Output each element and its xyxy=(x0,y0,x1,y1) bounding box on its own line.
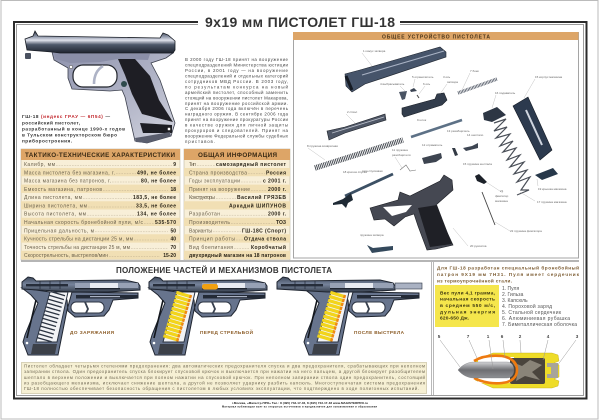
magazine rounds xyxy=(324,293,338,340)
callout numbers: 5 xyxy=(438,334,441,339)
callout numbers: 4 xyxy=(547,334,550,339)
part labels: тяга спусковая xyxy=(362,169,383,173)
table rows: Масса пистолета без магазина, г. xyxy=(24,170,115,176)
part 6 pin xyxy=(417,95,419,98)
safety description text box: ГШ-18 полностью обеспечивает безопасность обращения с пистолетом в любых условиях эксплуатации, что подтверждено в ходе полигонных испытаний. xyxy=(24,386,419,391)
part labels: 2 ствол xyxy=(347,110,358,114)
intro paragraph: спецподразделений Министерства юстиции xyxy=(185,62,289,68)
info rows: Годы эксплуатации xyxy=(189,178,240,184)
intro paragraph: стоящий на вооружении пистолет Макарова, xyxy=(185,95,288,100)
info rows: 2000 г. xyxy=(268,212,287,218)
safety description text box: Пистолет обладает четырьмя степенями предохранения: два автоматических предохранителя спуска и два предохранителя, срабатывающих при неполном xyxy=(24,364,425,368)
part labels: 5 ограничитель xyxy=(412,75,434,79)
panel header bar xyxy=(293,32,578,40)
part 3 slide stop block xyxy=(402,93,447,117)
part labels: пружина затвора xyxy=(360,233,384,237)
title: 9х19 мм ПИСТОЛЕТ ГШ-18 xyxy=(205,14,395,30)
part 23 slide catch xyxy=(367,245,393,253)
part labels: 20 рукоятка xyxy=(470,244,487,248)
info header xyxy=(184,149,290,160)
info rows: Принцип работы xyxy=(189,236,235,242)
info rows: Разработан xyxy=(189,212,220,218)
part 8 recoil spring xyxy=(315,140,403,168)
cartridge parts list: 6. Алюминиевая рубашка xyxy=(502,316,570,322)
part 14 sear xyxy=(463,143,478,151)
part 18 magazine cover xyxy=(535,168,558,180)
part labels: 19 крышка магазина xyxy=(538,187,567,191)
table rows: 134, не более xyxy=(137,211,176,218)
table rows: Высота пистолета, мм xyxy=(24,212,87,218)
part 5 limiter xyxy=(410,88,417,92)
pistol caption: разработанный в конце 1990-х годов xyxy=(22,126,125,132)
table: tactical and technical characteristics xyxy=(21,149,180,260)
trigger xyxy=(94,66,103,84)
section heading: parts positions: ПОЛОЖЕНИЕ ЧАСТЕЙ И МЕХАНИЗМОВ ПИСТОЛЕТА xyxy=(116,266,332,275)
part 17 magazine spring xyxy=(494,119,530,195)
part 11 disconnector spring xyxy=(400,165,416,171)
yellow callout: начальная скорость xyxy=(440,298,495,303)
info rows: двухрядный магазин на 18 патронов xyxy=(189,252,286,259)
case xyxy=(475,353,559,388)
part labels: 3 ось xyxy=(443,75,451,79)
lanyard loop xyxy=(167,127,171,131)
takedown pin xyxy=(121,81,127,87)
intro paragraph: в качестве оружия для личной защиты xyxy=(185,123,288,128)
intro paragraph: прокуроров и следователей. Принят на xyxy=(185,128,289,133)
part labels: 1 кожух затвора xyxy=(363,49,386,53)
gun cutaway: before loading xyxy=(22,277,140,355)
jacket xyxy=(474,356,517,383)
cartridge description: Для ГШ-18 разработан специальный бронебойный xyxy=(437,264,579,270)
safety description text box: шептало в верхнем положении и выключается при полном нажатии на спусковой крючок. При неполном запирании ствола один предохранитель, состоящий xyxy=(24,375,426,380)
table rows: 490, не более xyxy=(137,169,176,176)
part labels: 21 xyxy=(500,189,504,193)
intro paragraph: по результатам конкурса на новый xyxy=(185,84,289,89)
round tips xyxy=(177,295,191,342)
info rows: 2000 г. xyxy=(268,187,287,193)
part labels: 11 пружина xyxy=(392,148,408,152)
info background xyxy=(184,149,290,260)
cartridge parts list: 4. Пороховой заряд xyxy=(502,303,552,310)
info rows: Россия xyxy=(266,170,286,176)
part labels: фиксатор xyxy=(495,194,509,198)
table rows: 50 xyxy=(170,228,176,234)
info rows: с 2001 г. xyxy=(263,178,287,184)
pistol caption: в Тульском конструкторском бюро xyxy=(22,131,117,137)
white cavity xyxy=(478,357,514,383)
main pistol illustration xyxy=(25,31,175,143)
intro paragraph: С декабря 2006 года включён в перечень xyxy=(185,106,289,111)
cartridge description xyxy=(437,264,580,284)
table rows: 40 xyxy=(170,236,176,242)
table header xyxy=(21,149,180,160)
part labels: 22 пружина фиксатора xyxy=(510,229,542,233)
title plate xyxy=(198,18,400,28)
part 12 ejector xyxy=(422,153,442,164)
part labels: 8 пружина возвратная xyxy=(307,144,338,148)
grip panel xyxy=(118,59,173,122)
pistol caption xyxy=(22,114,125,144)
table rows: 70 xyxy=(170,245,176,251)
pistol caption: ГШ-18 (индекс ГРАУ — 6П54) — xyxy=(22,114,110,119)
part labels: 4 выбрасыватель xyxy=(380,82,405,86)
safety description text box: из разобщающего механизма, исключает снижение шептала, а другой не позволяет ударнику разбить капсюль. Многоступенчатая система предохранения xyxy=(24,380,426,386)
chambered round xyxy=(202,284,218,290)
intro paragraph: принят на вооружение российской армии. xyxy=(185,101,288,106)
part labels: затвора xyxy=(447,80,458,84)
frame screw xyxy=(69,65,73,69)
part 22 catch spring xyxy=(482,192,495,225)
table rows: 80, не более xyxy=(141,178,176,184)
callout numbers: 3 xyxy=(576,334,579,339)
part labels: 6 ось xyxy=(423,82,431,86)
info rows: самозарядный пистолет xyxy=(216,161,287,168)
table rows: 15-20 xyxy=(163,253,176,259)
part 10 and 19 trigger bar xyxy=(333,174,393,208)
part labels: 7 боек xyxy=(470,69,480,73)
label: ПЕРЕД СТРЕЛЬБОЙ xyxy=(200,328,254,335)
info rows: ТОЗ xyxy=(276,220,286,226)
intro paragraph: принят на вооружение прокуратуры России xyxy=(185,117,289,122)
magazine spring xyxy=(44,293,58,341)
powder charge xyxy=(510,358,545,384)
gun cutaway: after firing xyxy=(277,277,422,355)
cartridge parts list: 1. Пуля xyxy=(502,286,519,292)
footer imprint: г.Москва, «Магистр-ПРО» Тел.: 8 (495) 743-17-46, 8 (495) 743-17-48 www.MAGISTERPRO.ru xyxy=(232,401,368,405)
callout lines xyxy=(440,340,576,369)
footer imprint xyxy=(222,401,378,408)
powder grain xyxy=(512,360,542,381)
yellow callout: Вес пули 4,1 грамма, xyxy=(440,290,496,296)
bullet core xyxy=(458,362,514,378)
panel: general structure of the pistol xyxy=(293,32,578,258)
part 13 disconnector xyxy=(452,148,458,156)
part 2 barrel xyxy=(327,114,386,140)
yellow callout: дульная энергия xyxy=(440,310,495,316)
part 16 follower xyxy=(483,107,506,122)
info rows: Коробчатый xyxy=(251,244,286,251)
pistol caption: приборостроения. xyxy=(22,138,72,144)
table background xyxy=(21,149,180,260)
part labels: 14 шептало xyxy=(467,133,484,137)
part labels: 17 пружина магазина xyxy=(537,200,567,204)
dust cover shading xyxy=(54,53,150,63)
table: general information xyxy=(184,149,290,260)
part 4 extractor xyxy=(399,91,407,100)
pistol frame xyxy=(52,52,175,143)
info rows: Отдача ствола xyxy=(244,236,286,242)
yellow callout xyxy=(435,285,499,327)
panel heading: ОБЩЕЕ УСТРОЙСТВО ПИСТОЛЕТА xyxy=(382,32,490,40)
part 7 firing pin with spring xyxy=(458,79,497,93)
table rows: Точность стрельбы на дистанции 25 м, мм xyxy=(24,245,131,251)
yellow callout: 620-650 Дж. xyxy=(440,316,469,322)
callout numbers: 2 xyxy=(519,334,522,339)
intro paragraph: сотрудников МВД России. В 2003 году, xyxy=(185,79,288,84)
callout numbers xyxy=(438,334,579,339)
yellow callout: в среднем 550 м/с, xyxy=(440,303,496,309)
panel frame xyxy=(294,32,578,258)
table rows: Прицельная дальность, м xyxy=(24,228,95,234)
intro paragraph: России, в 2001 году — на вооружение xyxy=(185,68,289,73)
intro paragraph: приставов. xyxy=(185,139,215,144)
safety description text box xyxy=(22,362,426,394)
info rows: Варианты xyxy=(189,228,212,234)
cartridge parts list: 2. Гильза xyxy=(502,292,524,298)
part labels xyxy=(307,49,567,248)
divider band under tables xyxy=(21,260,579,262)
table rows: Масса магазина без патронов, г. xyxy=(24,178,111,184)
round tips xyxy=(331,295,345,342)
primer xyxy=(547,363,558,378)
part labels: 16 подаватель xyxy=(495,91,516,95)
info rows: Конструкторы xyxy=(189,195,215,201)
table rows: Длина пистолета, мм xyxy=(24,195,83,201)
info heading: ОБЩАЯ ИНФОРМАЦИЯ xyxy=(198,152,277,159)
cartridge parts list: 5. Стальной сердечник xyxy=(502,309,562,316)
intro paragraph: вооружение Федеральной службы судебных xyxy=(185,134,289,139)
table stripes xyxy=(21,168,180,259)
table rows: Калибр, мм xyxy=(24,162,56,168)
info stripes xyxy=(184,168,290,259)
callout numbers: 6 xyxy=(501,334,504,339)
info rows: Производитель xyxy=(189,220,230,226)
vertical divider xyxy=(432,262,434,395)
pistol slide xyxy=(25,31,175,53)
callout numbers: 7 xyxy=(467,334,470,339)
grip base plate xyxy=(140,123,172,133)
cartridge parts list: 3. Капсюль xyxy=(502,298,528,304)
table rows: Емкость магазина, патронов xyxy=(24,187,102,193)
info rows: Василий ГРЯЗЕВ xyxy=(237,194,286,201)
info rows: Вид боепитания xyxy=(189,245,233,251)
label: ДО ЗАРЯЖАНИЯ xyxy=(70,330,115,335)
table rows: Скорострельность, выстрелов/мин xyxy=(24,253,108,259)
exposed barrel xyxy=(395,283,422,289)
part labels: 12 отражатель xyxy=(422,143,443,147)
intro paragraph: армейский пистолет, способный заменить xyxy=(185,90,289,95)
info rows: Тип xyxy=(189,162,196,168)
cartridge parts list xyxy=(502,286,577,328)
table rows: 535-570 xyxy=(155,220,176,226)
intro paragraph: В 2000 году ГШ-18 принят на вооружение xyxy=(185,57,289,62)
label: ПОСЛЕ ВЫСТРЕЛА xyxy=(354,330,405,335)
cartridge cross-section diagram xyxy=(438,334,579,388)
table rows: 18 xyxy=(170,187,176,193)
table heading: ТАКТИКО-ТЕХНИЧЕСКИЕ ХАРАКТЕРИСТИКИ xyxy=(25,152,175,159)
table rows xyxy=(24,162,176,259)
magazine rounds xyxy=(170,293,184,340)
part 1 slide casing xyxy=(345,47,446,92)
part labels: 18 крючок спуска xyxy=(343,170,367,174)
intro paragraph: спецподразделений и отдельных категорий xyxy=(185,73,289,78)
part labels: разобщителя xyxy=(392,153,411,157)
part labels: 15 корпус магазина xyxy=(535,75,562,79)
table rows: 9 xyxy=(173,162,176,168)
callout numbers: 1 xyxy=(487,334,490,339)
intro paragraph: наградного оружия. В сентябре 2006 года xyxy=(185,112,289,117)
table rows: Кучность стрельбы на дистанции 25 м, мм xyxy=(24,236,134,242)
info rows: Принят на вооружение xyxy=(189,187,250,193)
leader lines xyxy=(308,53,538,246)
info rows: ГШ-18С (Спорт) xyxy=(242,228,286,234)
part 21 magazine catch xyxy=(475,174,487,184)
trigger guard opening xyxy=(73,65,117,87)
part labels: 15 пружина шептала xyxy=(463,162,492,166)
gun cutaway: before firing xyxy=(149,277,267,355)
muzzle xyxy=(25,53,31,59)
table rows: 33,5, не более xyxy=(136,202,176,210)
part 9 guide rod xyxy=(411,120,462,137)
part 20 frame with grip xyxy=(370,175,453,250)
cartridge description: из термоупрочнённой стали. xyxy=(437,278,512,284)
cartridge description: патрон 9Х19 мм 7Н31. Пуля имеет сердечник xyxy=(437,272,580,277)
part 15 magazine body xyxy=(513,97,552,160)
info rows: Аркадий ШИПУНОВ xyxy=(229,202,286,210)
part labels: магазина xyxy=(495,199,508,203)
part labels: 13 разобщитель xyxy=(447,129,470,133)
safety description text box: запирании ствола. Один предохранитель спуска блокирует спусковой крючок и выключается при нажатии на него пальцем, а другой блокирует разобщителем xyxy=(24,369,425,374)
table rows: Начальная скорость бронебойной пули, м/с xyxy=(24,219,144,226)
base shoe xyxy=(135,132,171,143)
intro paragraph xyxy=(185,57,289,144)
cartridge parts list: 7. Биметаллическая оболочка xyxy=(502,322,577,328)
table rows: Ширина пистолета, мм xyxy=(24,204,88,210)
footer imprint: Материал публикации взят из открытых источников и предназначен для ознакомления и образования xyxy=(222,405,378,408)
part labels: 9 шток xyxy=(417,118,427,122)
pistol caption: российский пистолет, xyxy=(22,120,80,126)
info rows: Страна производства xyxy=(189,170,247,176)
info rows xyxy=(189,161,287,259)
table rows: 183,5, не более xyxy=(133,194,176,201)
